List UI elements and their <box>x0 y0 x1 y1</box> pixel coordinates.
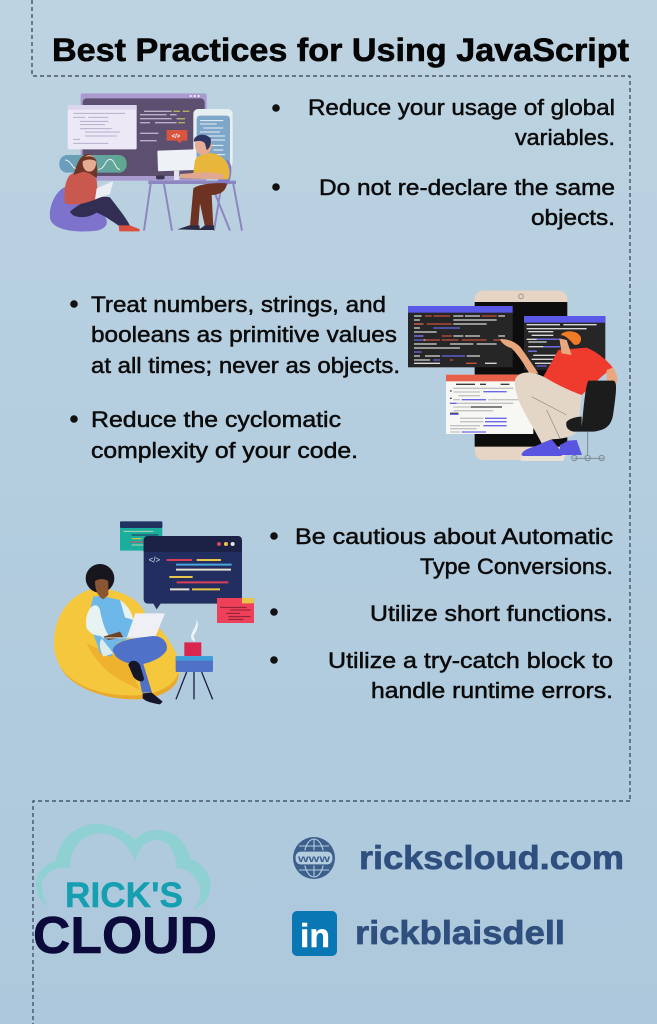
bullet list: conversions, functions, try-catch: handle runtime errors. <box>371 678 613 703</box>
bullet list: globals and re-declaring: Reduce your usage of global <box>308 95 615 120</box>
bullet list: globals and re-declaring <box>272 95 615 230</box>
illustration: developer on beanbag with laptop <box>54 521 254 704</box>
illustration: two developers at screens <box>50 93 242 231</box>
icon: globe www: www <box>297 853 331 865</box>
bullet list: primitives and complexity: Treat numbers, strings, and <box>91 292 386 317</box>
illustration: two developers at screens: </> <box>172 134 181 140</box>
bullet list: conversions, functions, try-catch: Utilize short functions. <box>370 601 613 626</box>
bullet list: conversions, functions, try-catch <box>270 524 613 703</box>
icon: globe www <box>293 837 335 879</box>
bullet list: primitives and complexity: Reduce the cyclomatic <box>91 407 341 432</box>
bullet list: primitives and complexity <box>70 292 400 463</box>
bullet list: globals and re-declaring: variables. <box>515 125 615 150</box>
bullet list: primitives and complexity: at all times; never as objects. <box>91 353 400 378</box>
bullet list: conversions, functions, try-catch: Be cautious about Automatic <box>295 524 613 549</box>
bullet list: primitives and complexity: booleans as primitive values <box>91 322 397 347</box>
illustration: developer pointing at code windows <box>408 291 617 461</box>
LinkedIn handle: rickblaisdell <box>355 914 565 951</box>
illustration: developer on beanbag with laptop: </> <box>149 555 161 564</box>
bullet list: globals and re-declaring: Do not re-declare the same <box>319 175 615 200</box>
logo: Rick's Cloud: CLOUD <box>33 907 217 965</box>
icon: LinkedIn <box>292 911 337 956</box>
title: Best Practices for Using JavaScript <box>52 32 629 68</box>
bullet list: primitives and complexity: complexity of your code. <box>91 438 358 463</box>
logo: Rick's Cloud: RICK'S <box>65 876 183 915</box>
logo: Rick's Cloud <box>33 824 217 965</box>
icon: LinkedIn: in <box>300 917 330 954</box>
website link: rickscloud.com <box>359 839 624 876</box>
bullet list: conversions, functions, try-catch: Type Conversions. <box>420 554 613 579</box>
bullet list: globals and re-declaring: objects. <box>531 205 615 230</box>
bullet list: conversions, functions, try-catch: Utilize a try-catch block to <box>328 648 613 673</box>
